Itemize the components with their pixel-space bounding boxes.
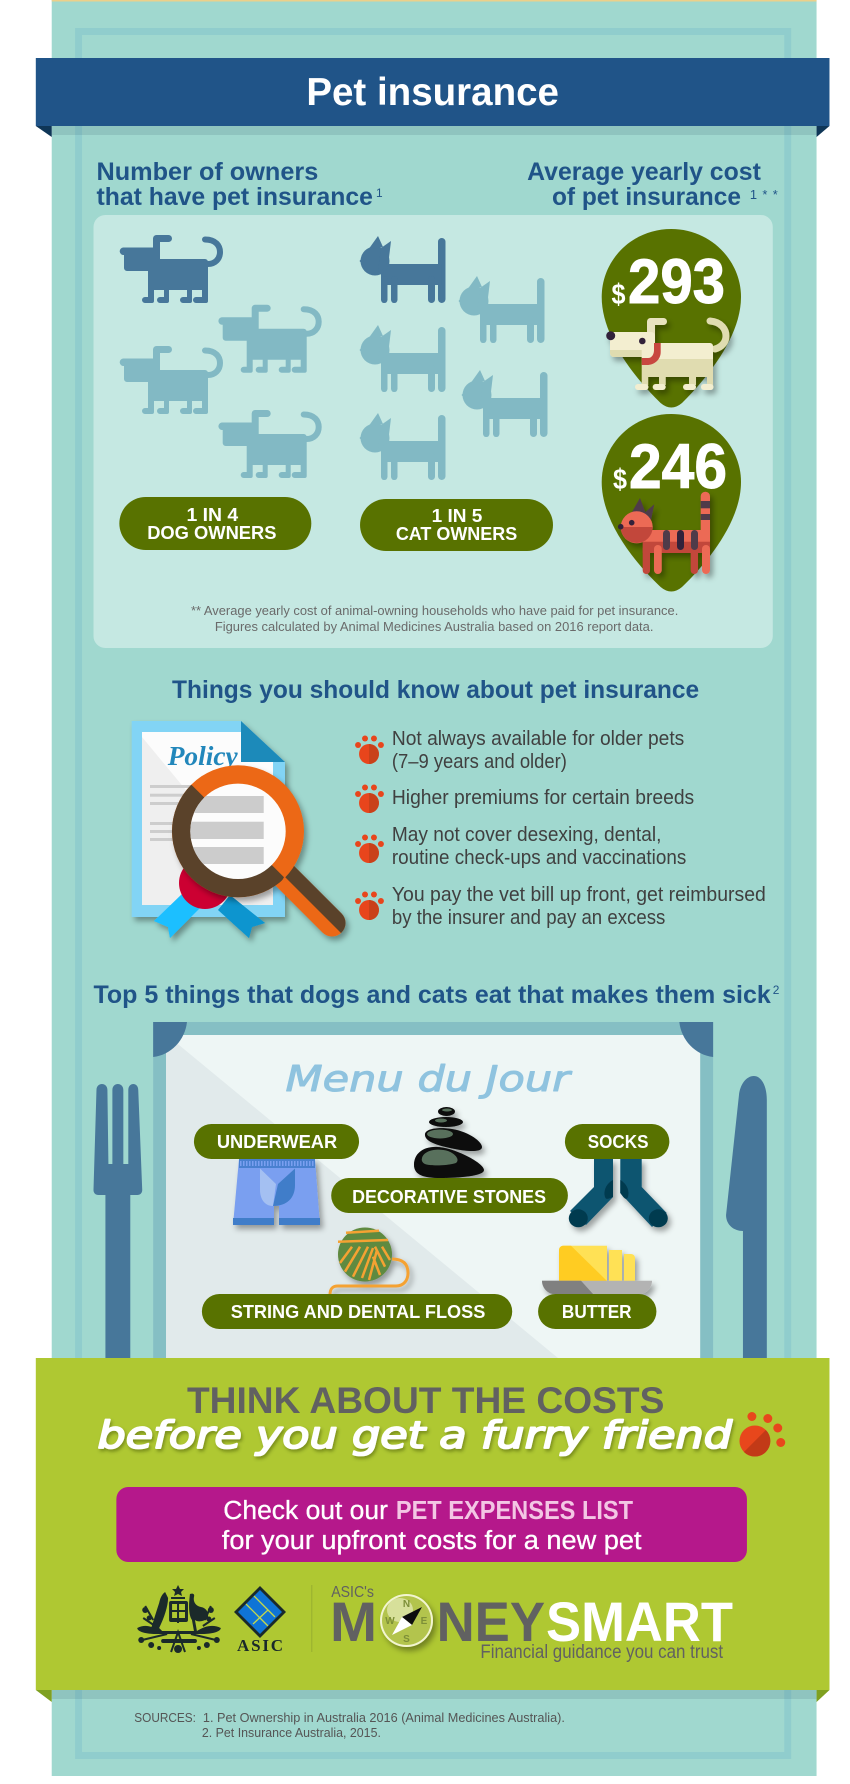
menu heading: Menu du Jour: [285, 1059, 573, 1100]
icon: ball of string: [330, 1228, 408, 1295]
script subheading: before you get a furry friend: [97, 1414, 733, 1457]
pill: 1 in 4 dog owners: [119, 497, 311, 550]
heading: average yearly cost: of pet insurance: [552, 183, 741, 211]
pill: butter: [538, 1294, 656, 1329]
bullet 2: Higher premiums for certain breeds: [392, 787, 694, 809]
sources: 1. Pet Ownership in Australia 2016 (Animal Medicines Australia).: [203, 1710, 565, 1725]
logo: ASIC: ASIC: [237, 1636, 283, 1655]
pill: underwear: [194, 1124, 359, 1159]
footnote: ** Average yearly cost of animal-owning households who have paid for pet insurance.: [191, 603, 678, 618]
title banner: [36, 58, 829, 137]
bullet 4: by the insurer and pay an excess: [392, 907, 665, 929]
icon: butter: [542, 1246, 652, 1294]
bullet 4: [355, 884, 766, 929]
dog icons: 1 in 4: [120, 235, 319, 478]
icon: compass: N: [403, 1599, 410, 1610]
pill: string and dental floss: [202, 1294, 512, 1329]
heading: things you should know: Things you should know about pet insurance: [172, 676, 699, 704]
pill: socks: [565, 1124, 669, 1159]
bullet 1: Not always available for older pets: [392, 728, 684, 750]
button: pet expenses list: for your upfront costs for a new pet: [222, 1527, 642, 1555]
pill: 1 in 4 dog owners: DOG OWNERS: [147, 523, 277, 543]
bullet 1: [355, 728, 684, 773]
call to action heading: THINK ABOUT THE COSTS: [187, 1380, 664, 1421]
pill: decorative stones: [331, 1178, 568, 1213]
heading: average yearly cost: Average yearly cost: [527, 158, 761, 186]
bullet 3: [355, 824, 686, 869]
logo: MoneySmart: M: [330, 1590, 377, 1653]
icon: knife: [726, 1076, 767, 1358]
panel: menu: [153, 1022, 713, 1358]
title banner: Pet insurance: [306, 71, 559, 114]
heading: average yearly cost: 1**: [750, 187, 778, 202]
pill: underwear: UNDERWEAR: [217, 1132, 337, 1152]
logo: MoneySmart: SMART: [546, 1590, 733, 1653]
heading: number of owners: 1: [376, 186, 383, 200]
cost pin: dog $293: $: [612, 279, 626, 311]
bullet 2: [355, 784, 694, 813]
magnifying glass: [172, 765, 332, 923]
icon: fork: [93, 1084, 142, 1358]
pill: 1 in 5 cat owners: [360, 499, 553, 551]
sources: 2. Pet Insurance Australia, 2015.: [202, 1725, 381, 1740]
cost pin: dog $293: [602, 229, 741, 408]
logo: MoneySmart: ASIC's: [331, 1584, 374, 1601]
footnote: Figures calculated by Animal Medicines Australia based on 2016 report data.: [215, 619, 653, 634]
icon: cream dog: [606, 318, 726, 390]
icon: compass: S: [403, 1634, 410, 1645]
heading: number of owners: Number of owners: [96, 158, 318, 186]
list: things to know: [355, 728, 766, 929]
pill: socks: SOCKS: [588, 1132, 648, 1152]
heading: number of owners: [96, 158, 383, 211]
panel: call to action banner: [36, 1358, 829, 1702]
pill: decorative stones: DECORATIVE STONES: [352, 1187, 546, 1207]
policy document: Policy: [167, 741, 239, 771]
button: pet expenses list: PET EXPENSES LIST: [396, 1497, 633, 1525]
cost pin: cat $246: $: [613, 464, 627, 496]
heading: top 5 things: Top 5 things that dogs and cats eat that makes them sick: [93, 981, 771, 1009]
footnote: [191, 603, 678, 634]
cost pin: cat $246: [602, 414, 741, 592]
sources: SOURCES:: [134, 1710, 196, 1725]
button: pet expenses list: [116, 1487, 747, 1562]
cost pin: cat $246: 246: [629, 432, 727, 502]
logo: ASIC: [234, 1586, 286, 1655]
logo: Australian coat of arms: [137, 1585, 221, 1653]
icon: orange cat: [618, 492, 710, 574]
policy document: [132, 721, 285, 938]
heading: top 5 things: 2: [773, 983, 780, 997]
pill: string and dental floss: STRING AND DENTAL FLOSS: [231, 1302, 485, 1322]
heading: average yearly cost: [527, 158, 778, 211]
bullet 1: (7–9 years and older): [392, 751, 567, 773]
bullet 4: You pay the vet bill up front, get reimbursed: [392, 884, 766, 906]
divider: [310, 1585, 313, 1652]
pill: 1 in 4 dog owners: 1 IN 4: [186, 505, 238, 525]
icon: large paw: [739, 1412, 785, 1457]
pill: butter: BUTTER: [562, 1302, 632, 1322]
logo: MoneySmart: [330, 1584, 733, 1663]
icon: underwear: [233, 1159, 320, 1225]
pill: 1 in 5 cat owners: 1 IN 5: [432, 506, 482, 526]
bullet 3: routine check-ups and vaccinations: [392, 847, 686, 869]
button: pet expenses list: Check out our: [223, 1497, 388, 1525]
icon: compass: [380, 1594, 433, 1647]
icon: compass: W: [385, 1616, 395, 1627]
icon: decorative stones: [414, 1107, 484, 1178]
sources: [134, 1710, 565, 1740]
bullet 3: May not cover desexing, dental,: [392, 824, 661, 846]
cat icons: 1 in 5: [360, 236, 548, 480]
heading: number of owners: that have pet insurance: [96, 183, 373, 211]
logo: MoneySmart: Financial guidance you can trust: [480, 1642, 724, 1663]
icon: socks: [569, 1159, 668, 1227]
logo: MoneySmart: NEY: [437, 1590, 545, 1653]
icon: compass: E: [421, 1616, 428, 1627]
illustration: policy and magnifying glass: [132, 721, 332, 938]
cost pin: dog $293: 293: [628, 247, 725, 317]
pill: 1 in 5 cat owners: CAT OWNERS: [396, 524, 517, 544]
panel: ownership and cost: [93, 215, 773, 648]
